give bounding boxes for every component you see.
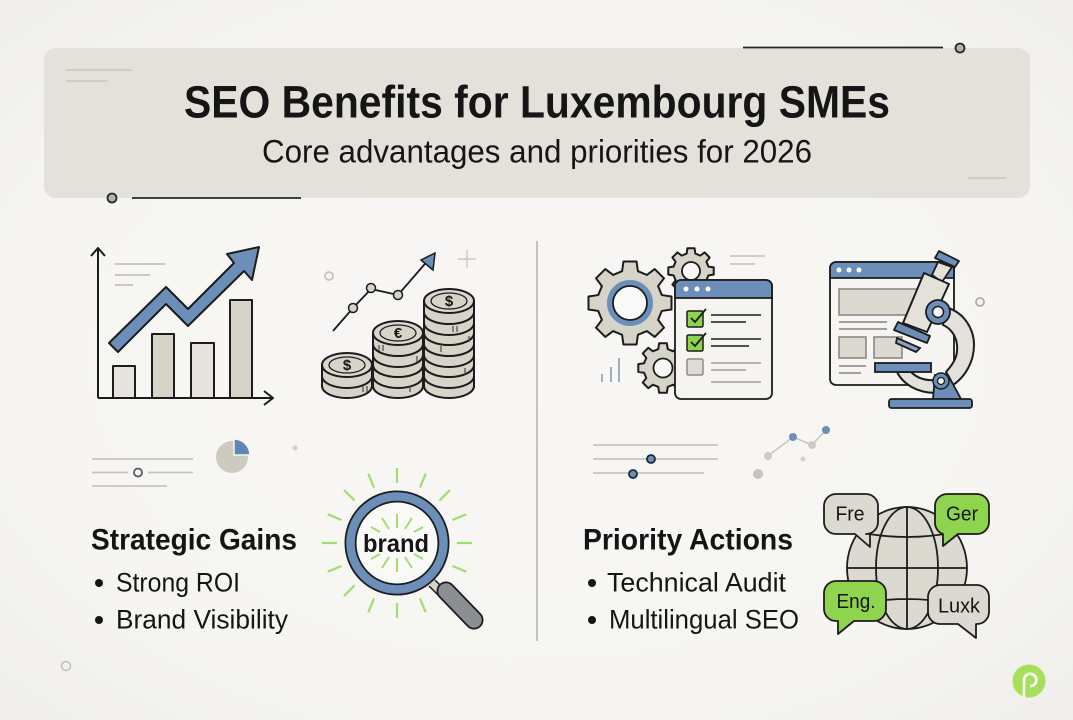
list item: brand visibility: Brand Visibility [116,604,288,634]
heading: strategic gains: Strategic Gains [91,524,297,556]
bubble: Fre [824,494,878,547]
logo badge [1012,664,1046,698]
list item: strong ROI: Strong ROI [116,568,240,598]
bubble: Ger [935,494,989,546]
list item: technical audit: Technical Audit [607,568,786,598]
icon: gears and checklist [589,248,772,399]
icon: magnifying glass over brand: brand [363,530,429,558]
header panel [44,44,1030,202]
decoration: small circle bottom left [62,662,70,670]
icon: globe with language bubbles [824,494,989,638]
heading: priority actions: Priority Actions [583,524,793,556]
icon: coin stacks with growth line: $ [343,357,352,374]
bubble: Eng [824,581,886,634]
decoration: right sliders and scatter [593,426,830,479]
bubble: Luxk: Luxk [938,594,981,618]
icon: coin stacks with growth line: $ [445,293,454,310]
icon: magnifying glass over brand [322,468,474,620]
right section: priority actions [583,524,799,634]
icon: bar chart with rising arrow [91,247,273,405]
icon: coin stacks with growth line [322,250,476,398]
icon: coin stacks with growth line: € [394,325,403,342]
list item: multilingual SEO: Multilingual SEO [609,604,799,634]
bubble: Fre: Fre [836,502,864,526]
bubble: Luxk [928,585,989,638]
bubble: Eng: Eng. [836,590,876,613]
left section: strategic gains [91,524,297,634]
divider [536,241,538,641]
subtitle: Core advantages and priorities for 2026 [262,134,812,170]
decoration: left sliders and pie [92,439,298,486]
bubble: Ger: Ger [946,502,978,526]
title: SEO Benefits for Luxembourg SMEs [184,76,890,128]
icon: browser window and microscope [830,251,984,408]
